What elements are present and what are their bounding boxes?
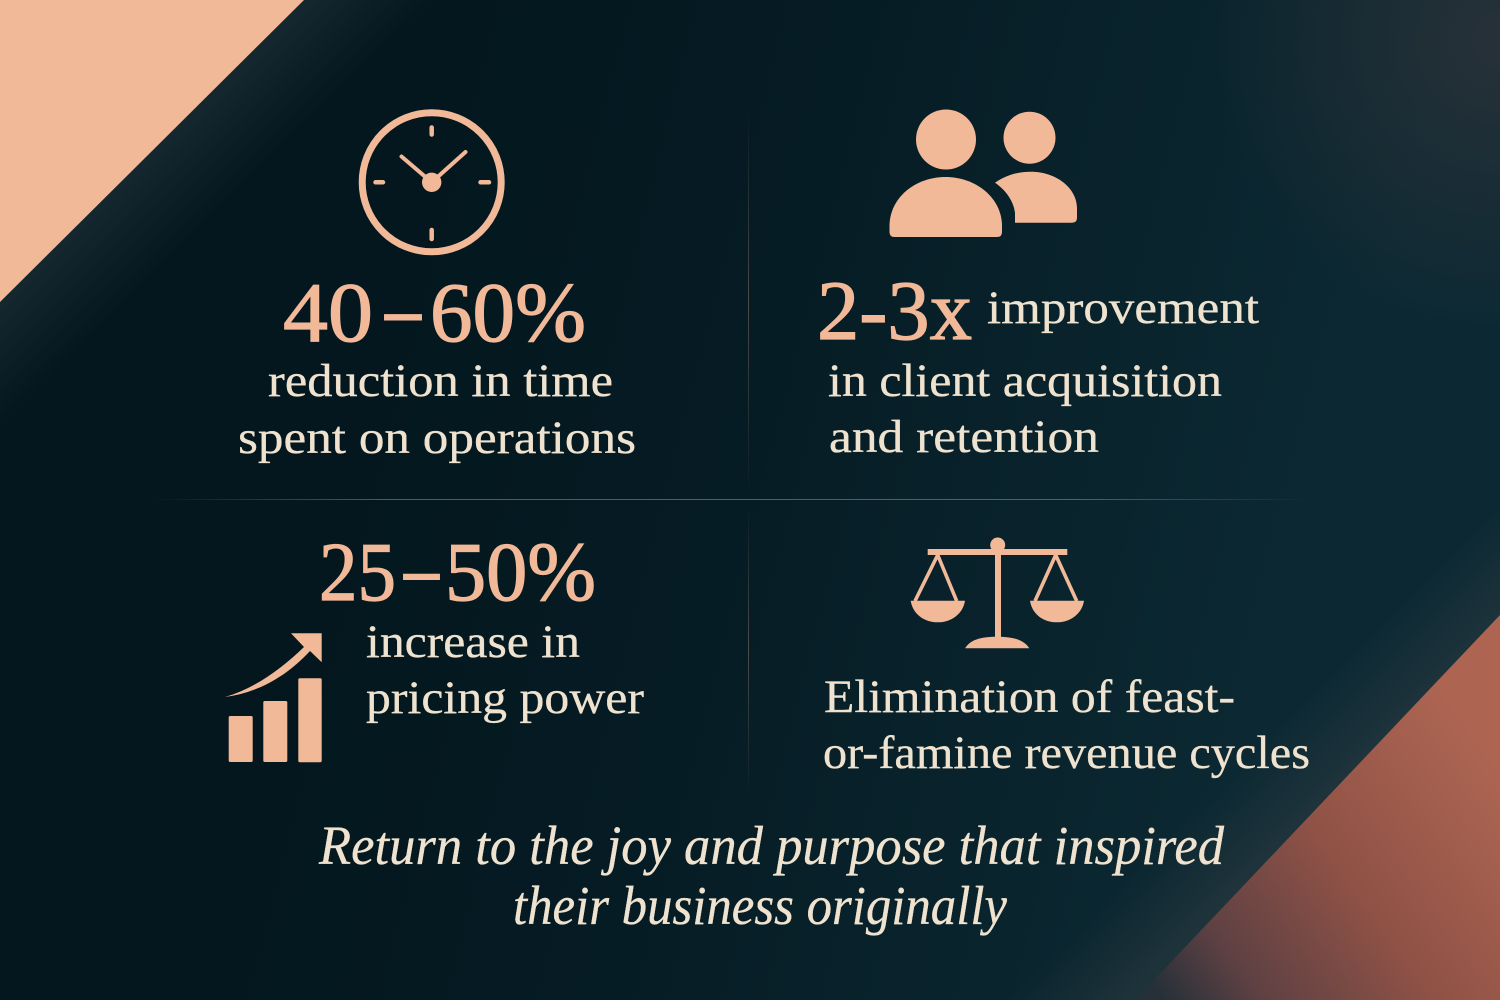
description: client acquisition: improvement (987, 282, 1259, 334)
description: revenue stability: Elimination of feast- (824, 671, 1235, 723)
closing quote (318, 815, 1224, 936)
description: pricing power (366, 616, 644, 724)
statistic: 25–50%: 25 (319, 526, 396, 619)
statistic: 25–50% (319, 526, 596, 619)
description: client acquisition (828, 282, 1259, 463)
panel: revenue stability (823, 538, 1310, 779)
description: time reduction: reduction in time (268, 355, 613, 407)
panel: time reduction (238, 113, 636, 464)
description: client acquisition: and retention (829, 411, 1099, 463)
statistic: 25–50%: – (404, 534, 439, 607)
statistic: 40–60%: 40 (283, 266, 373, 360)
description: pricing power: increase in (366, 616, 580, 668)
icon: rising bar chart with arrow (225, 633, 322, 762)
icon: clock (362, 113, 501, 252)
statistic: 40–60%: – (385, 272, 421, 348)
description: revenue stability (823, 671, 1310, 779)
description: pricing power: pricing power (366, 672, 644, 724)
description: client acquisition: in client acquisition (828, 355, 1222, 407)
statistic: 40–60%: 60% (430, 266, 586, 360)
top-left peach corner triangle (0, 0, 304, 302)
description: revenue stability: or-famine revenue cycles (823, 727, 1310, 779)
description: time reduction (238, 355, 636, 464)
bottom-right terracotta corner triangle (1135, 615, 1500, 1000)
description: time reduction: spent on operations (238, 412, 636, 464)
statistic: 40–60% (283, 266, 586, 360)
icon: two people (890, 110, 1077, 237)
icon: balance scale (911, 538, 1084, 648)
panel: client acquisition (817, 110, 1259, 463)
closing quote: Return to the joy and purpose that inspired (318, 815, 1224, 876)
statistic: 25–50%: 50% (445, 526, 596, 619)
statistic: 2-3x: 2-3x (817, 264, 972, 358)
panel: pricing power (225, 526, 644, 762)
closing quote: their business originally (513, 875, 1008, 936)
